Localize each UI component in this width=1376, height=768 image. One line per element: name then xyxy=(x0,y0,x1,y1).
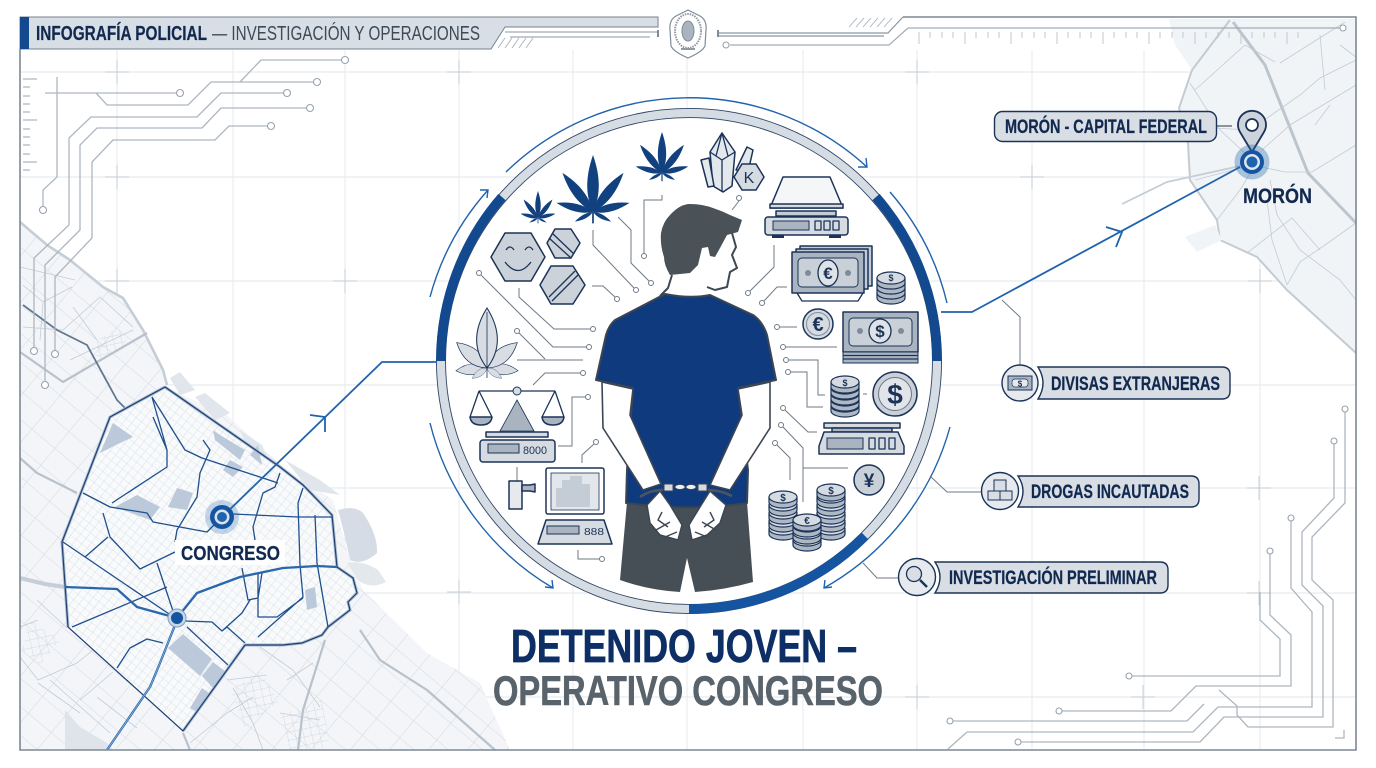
person shirt xyxy=(596,294,776,508)
icon: euro coin: € xyxy=(812,314,824,336)
header subtitle: — INVESTIGACIÓN Y OPERACIONES xyxy=(212,22,480,45)
icon: balance scale xyxy=(470,387,564,462)
person left hand xyxy=(647,491,682,540)
title line 1: DETENIDO JOVEN – xyxy=(511,620,857,672)
marker: Congreso xyxy=(205,500,239,534)
icon: small coin stack: $ xyxy=(888,273,894,283)
emblem xyxy=(670,10,706,58)
icon: small coin stack xyxy=(877,272,905,304)
handcuffs xyxy=(640,484,732,497)
label: Morón: MORÓN xyxy=(1243,184,1312,208)
person neck and face xyxy=(660,225,737,297)
icon: yen coin xyxy=(854,465,884,495)
thin orbit arrows xyxy=(430,98,950,588)
person hair xyxy=(661,204,742,275)
icon: balance scale: 8000 xyxy=(523,445,547,457)
icon: scale top right xyxy=(765,177,848,238)
icon: crystals with K xyxy=(701,133,764,192)
icon: right coin stack: $ xyxy=(828,486,834,497)
callout: divisas extranjeras: DIVISAS EXTRANJERAS xyxy=(1051,374,1220,395)
icon: pill upper xyxy=(547,229,580,258)
marker: Morón xyxy=(1234,144,1270,180)
icon: crystals with K: K xyxy=(744,170,755,187)
icon: dollar bill stack xyxy=(843,312,918,363)
icon: cannabis leaf top xyxy=(635,132,689,181)
top-right ruler and lines xyxy=(718,17,1346,48)
person shorts xyxy=(620,502,753,592)
marker: junction xyxy=(168,609,186,627)
icon: left coin stack: $ xyxy=(780,493,786,504)
person right hand xyxy=(689,491,726,540)
icon: banknote euro stack: € xyxy=(823,264,833,283)
header text: INFOGRAFÍA POLICIAL xyxy=(36,22,207,45)
icon: right coin stack xyxy=(817,484,845,540)
icon: euro coin xyxy=(803,309,833,339)
icon: front euro coin stack xyxy=(793,514,821,551)
icon: left coin stack xyxy=(769,491,797,540)
icon: laptop xyxy=(538,468,612,544)
icon circuit connectors xyxy=(476,195,867,562)
detained person xyxy=(596,204,776,592)
icon: pill lower xyxy=(540,266,585,304)
callout: investigación preliminar xyxy=(863,558,1168,596)
icon: laptop: 888 xyxy=(584,527,605,538)
pin: Morón xyxy=(1238,111,1266,152)
callout: drogas incautadas: DROGAS INCAUTADAS xyxy=(1031,482,1189,503)
label: Morón - Capital Federal: MORÓN - CAPITAL FEDERAL xyxy=(1005,116,1207,138)
icon: dollar coin xyxy=(873,372,917,416)
callout: drogas incautadas xyxy=(930,472,1199,510)
callout: investigación preliminar: INVESTIGACIÓN PRELIMINAR xyxy=(949,567,1157,589)
left decorative circuit lines xyxy=(23,56,348,388)
header bar xyxy=(20,17,658,49)
icon: dollar coin stack xyxy=(831,376,859,417)
finger marks xyxy=(656,512,716,537)
icon: dollar bill stack: $ xyxy=(875,322,885,341)
icon: scale lower right xyxy=(819,423,904,454)
map: Morón district xyxy=(1122,19,1356,353)
icon: small cannabis leaf xyxy=(520,191,556,223)
callout: divisas extranjeras: $ xyxy=(1018,380,1023,388)
person profile outline xyxy=(660,233,737,296)
icon: dollar coin stack: $ xyxy=(842,378,848,388)
map: city of Buenos Aires with Congreso xyxy=(55,380,365,750)
label: Congreso: CONGRESO xyxy=(181,543,280,565)
central ring xyxy=(441,113,937,609)
icon: smiley pill xyxy=(491,233,545,281)
connector: ring to Morón xyxy=(941,167,1240,312)
icon: front euro coin stack: € xyxy=(804,516,810,527)
person left arm xyxy=(602,382,661,490)
icon: banknote euro stack xyxy=(792,246,872,301)
label: Morón - Capital Federal xyxy=(994,112,1232,142)
bottom-right decorative circuit lines xyxy=(947,406,1348,749)
map: Buenos Aires surroundings xyxy=(20,220,510,750)
icon: dollar coin: $ xyxy=(887,379,903,410)
callout: divisas extranjeras xyxy=(1002,300,1230,401)
person right arm xyxy=(710,382,770,490)
title line 2: OPERATIVO CONGRESO xyxy=(493,667,883,714)
icon: yen coin: ¥ xyxy=(864,471,875,492)
icon: device camera xyxy=(509,481,535,509)
icon: outlined cannabis leaf xyxy=(452,308,522,381)
icon: large cannabis leaf xyxy=(556,155,630,223)
connector: Congreso to ring xyxy=(222,362,437,517)
